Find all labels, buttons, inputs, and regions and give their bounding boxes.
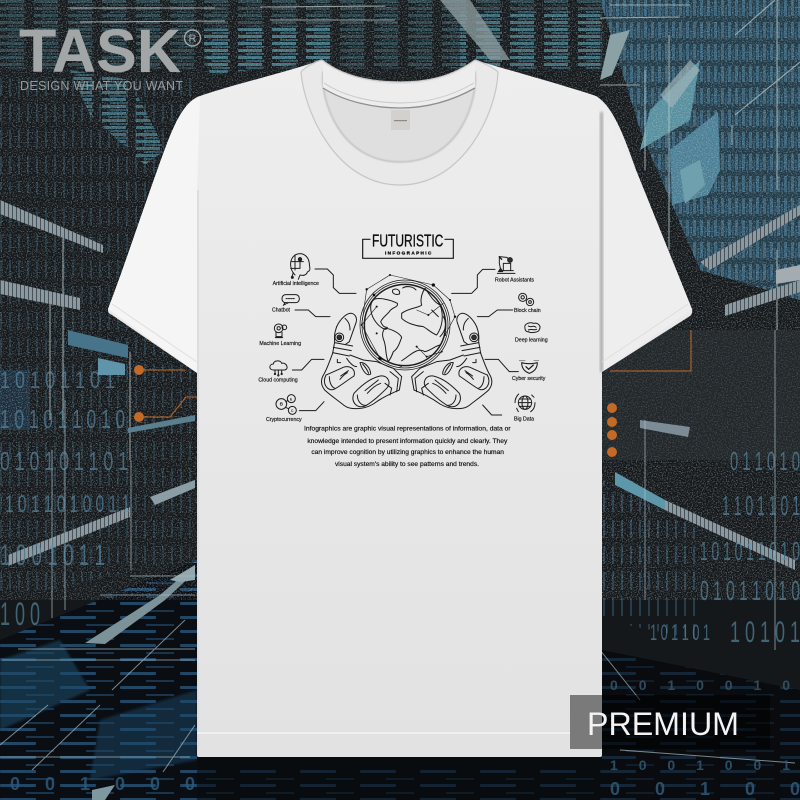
icon labels: Cyber security — [512, 376, 545, 382]
brand logo: TASK: R — [188, 33, 196, 45]
icon: machine learning lightbulb gear — [274, 324, 287, 338]
icon: cloud computing — [270, 361, 287, 376]
premium badge — [570, 695, 770, 749]
binary columns: 1 0 1 1 0 1 0 0 1 1 — [5, 491, 130, 518]
icon labels: Cryptocurrency — [266, 417, 302, 423]
icon: cryptocurrency coins: C — [291, 409, 294, 413]
icon: artificial intelligence head — [291, 254, 310, 279]
continent: south america — [383, 328, 402, 362]
infographic title: FUTURISTIC — [372, 231, 443, 251]
floor binary: 0 0 1 0 0 — [610, 779, 800, 799]
binary columns: 0 1 0 1 0 1 1 0 1 — [0, 446, 128, 476]
left robotic hand — [322, 313, 402, 409]
floor binary: 1 0 0 1 0 0 1 — [610, 757, 790, 773]
title frame — [363, 239, 453, 258]
printed infographic — [258, 231, 548, 468]
floor binary: 0 0 1 0 0 0 — [10, 774, 195, 794]
continent: africa and eurasia — [402, 288, 442, 335]
continent: north america — [371, 299, 397, 329]
brand logo: TASK: TASK — [19, 17, 181, 85]
top scan lines — [50, 0, 800, 460]
icon: deep learning brain — [525, 323, 540, 333]
icon: block chain gears — [519, 293, 534, 306]
orange circuit nodes — [134, 330, 691, 456]
shirt body — [108, 60, 692, 757]
description paragraph: Infographics are graphic visual representations of information, data or — [304, 427, 511, 433]
finger two — [353, 376, 389, 407]
binary columns — [0, 367, 800, 649]
description paragraph: visual system's ability to see patterns and trends. — [335, 462, 479, 468]
icon labels: Deep learning — [515, 337, 548, 343]
cuff details — [337, 358, 398, 395]
right robotic hand — [412, 313, 492, 409]
continent: islands and south land — [392, 287, 446, 361]
binary columns: 1 0 1 1 0 1 — [650, 620, 710, 645]
icon: big data globe — [515, 394, 535, 412]
icon: robot assistant arm — [497, 257, 515, 273]
icon labels: Robot Assistants — [495, 277, 534, 283]
binary columns: 1 0 0 1 0 1 1 — [0, 539, 105, 572]
floor binary — [10, 677, 800, 799]
globe — [360, 274, 456, 370]
brand logo: TASK: DESIGN WHAT YOU WANT — [20, 79, 183, 93]
description paragraph: knowledge intended to present information quickly and clearly. They — [307, 439, 507, 445]
icon labels: Artificial intelligence — [273, 281, 319, 287]
description paragraph: can improve cognition by utilizing graphics to enhance the human — [311, 450, 504, 456]
infographic title — [372, 231, 443, 255]
icon: cryptocurrency coins: B — [280, 402, 284, 407]
icon: chatbot speech bubble — [282, 295, 299, 305]
icon: cyber security shield — [519, 361, 539, 373]
icon: cryptocurrency coins: E — [290, 397, 293, 401]
icon labels: Big Data — [514, 417, 535, 423]
binary columns: 1 0 1 0 1 1 0 1 — [0, 367, 115, 394]
neck tag — [391, 110, 410, 130]
noise texture — [0, 0, 800, 600]
collar ribbing — [301, 60, 498, 185]
floor binary: 0 0 1 0 0 1 0 — [610, 677, 790, 693]
binary columns: 1 0 0 — [0, 596, 40, 632]
finger one — [324, 367, 354, 390]
sleeve highlights and folds — [108, 96, 692, 755]
icon labels — [258, 277, 548, 423]
icon: cryptocurrency coins — [276, 395, 296, 414]
premium badge: PREMIUM — [587, 706, 739, 742]
icon labels: Cloud computing — [258, 377, 298, 383]
icon labels: Machine Learning — [259, 341, 301, 347]
connector lines — [292, 269, 518, 415]
t-shirt — [108, 60, 692, 757]
icon labels: Block chain — [514, 308, 541, 314]
icon labels: Chatbot — [272, 307, 290, 313]
floor scan lines — [0, 330, 795, 772]
infographic title: INFOGRAPHIC — [385, 250, 432, 255]
back collar band — [323, 64, 475, 108]
neck opening — [323, 72, 475, 162]
binary columns: 1 0 1 0 1 1 0 1 0 — [0, 404, 125, 434]
network nodes — [362, 275, 455, 367]
description paragraph — [304, 427, 511, 468]
